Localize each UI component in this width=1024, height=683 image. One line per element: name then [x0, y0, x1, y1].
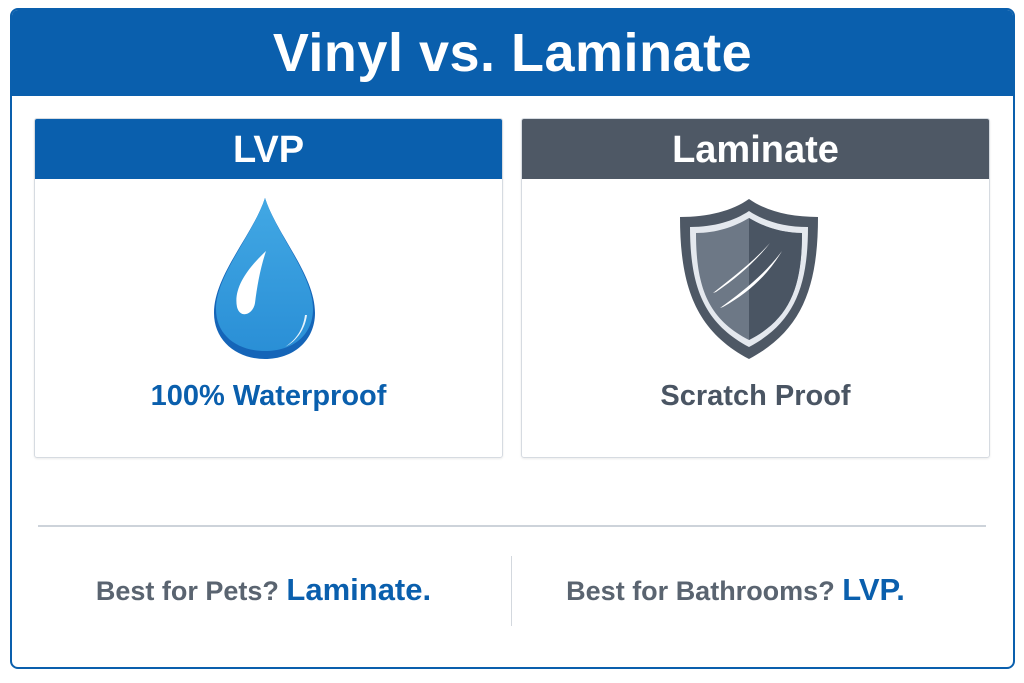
icon: shield with scratches: [680, 199, 818, 359]
heading: Laminate: [522, 119, 989, 179]
panel: LVP: [34, 118, 503, 458]
panel: Laminate: [521, 118, 990, 458]
heading: LVP: [35, 119, 502, 179]
heading: Laminate: Laminate: [672, 129, 839, 171]
title bar: Vinyl vs. Laminate: [273, 23, 752, 83]
label: 100% Waterproof: 100% Waterproof: [151, 380, 386, 412]
text: Best for Pets: Best for Pets? Laminate.: [96, 572, 431, 607]
title bar: [12, 10, 1013, 96]
icon: water drop: [214, 198, 315, 359]
label: Scratch Proof: Scratch Proof: [660, 380, 851, 412]
heading: LVP: LVP: [233, 129, 304, 171]
text: Best for Bathrooms: Best for Bathrooms? LVP.: [566, 572, 905, 607]
